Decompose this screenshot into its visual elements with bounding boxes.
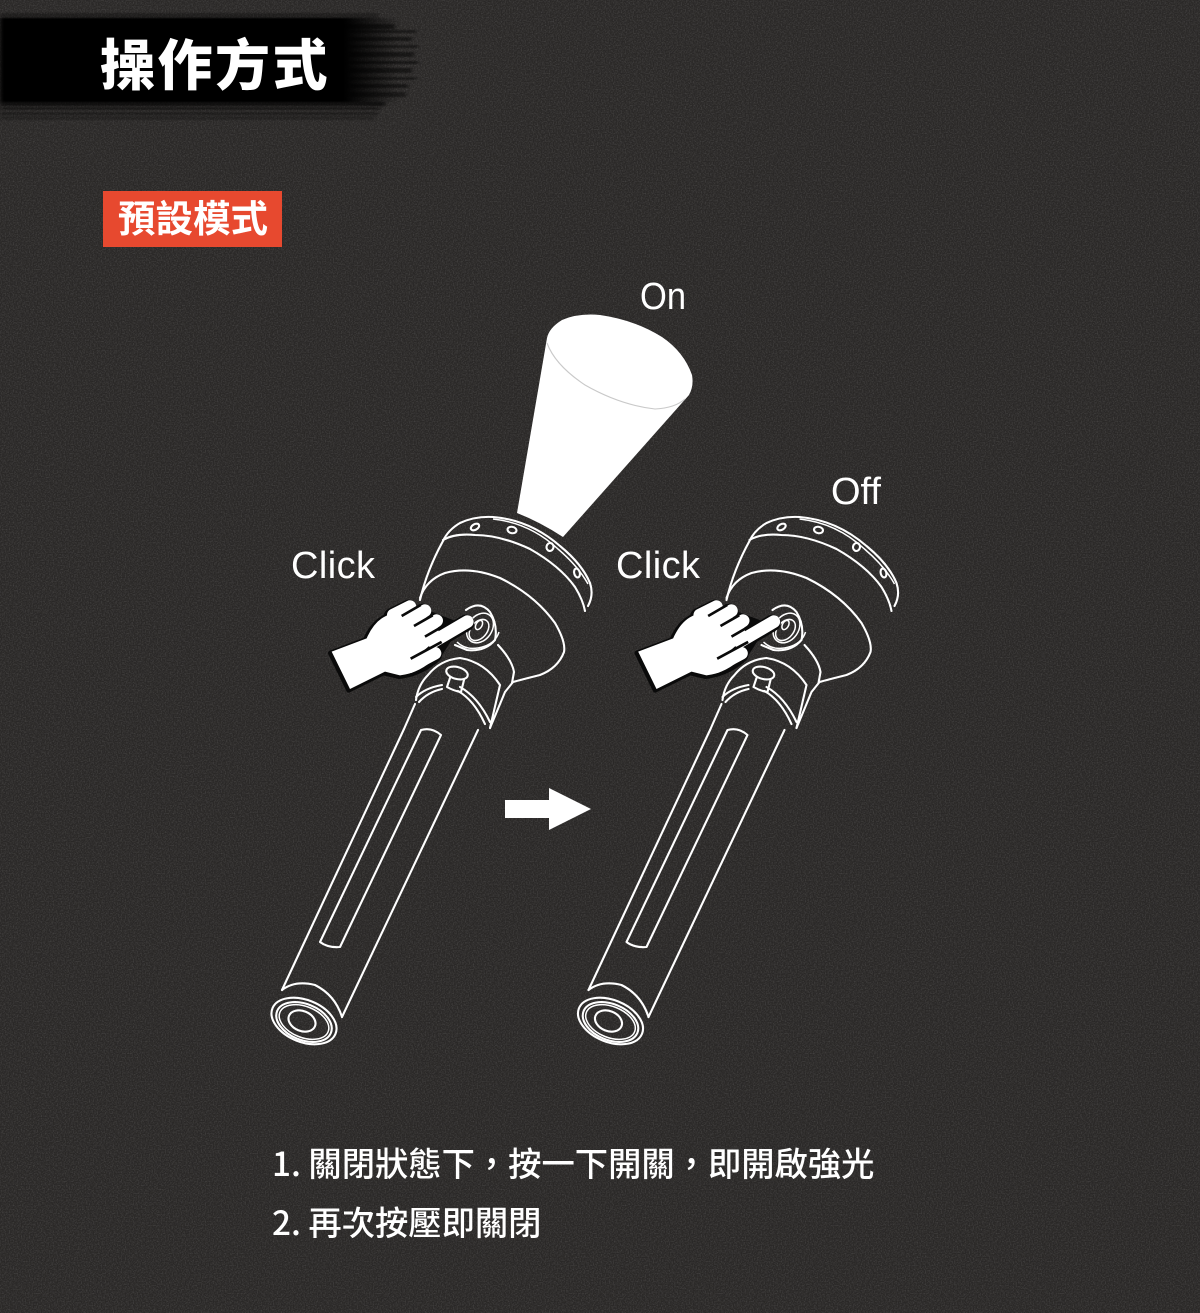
instructions text bbox=[272, 1137, 874, 1245]
body tube bbox=[282, 704, 478, 1017]
tail cap bbox=[265, 983, 343, 1053]
instructions text: 1. 關閉狀態下，按一下開關，即開啟強光 bbox=[272, 1137, 874, 1186]
label: On: On bbox=[640, 276, 686, 318]
tag: default mode: 預設模式 bbox=[118, 188, 268, 243]
power switch bbox=[455, 605, 499, 650]
label: Click left: Click bbox=[291, 545, 376, 587]
flashlight head bbox=[420, 517, 592, 728]
collar and button bbox=[416, 658, 500, 728]
title banner: brush stroke with heading bbox=[0, 13, 418, 120]
arrow bbox=[505, 788, 591, 830]
tail cap bbox=[571, 983, 650, 1053]
instructions text: 2. 再次按壓即關閉 bbox=[272, 1196, 541, 1245]
body tube bbox=[588, 704, 784, 1017]
hand pointing at switch bbox=[637, 604, 774, 690]
power switch bbox=[762, 605, 806, 650]
flashlight head bbox=[726, 517, 898, 728]
title banner: brush stroke with heading: 操作方式 bbox=[100, 21, 330, 101]
collar and button bbox=[722, 658, 806, 728]
light beam bbox=[517, 315, 693, 537]
flashlight right: off state press bbox=[571, 517, 898, 1053]
label: Click right: Click bbox=[616, 545, 701, 587]
label: Off: Off bbox=[831, 471, 881, 513]
hand pointing at switch bbox=[330, 604, 467, 690]
flashlight left: on state press bbox=[265, 517, 592, 1053]
